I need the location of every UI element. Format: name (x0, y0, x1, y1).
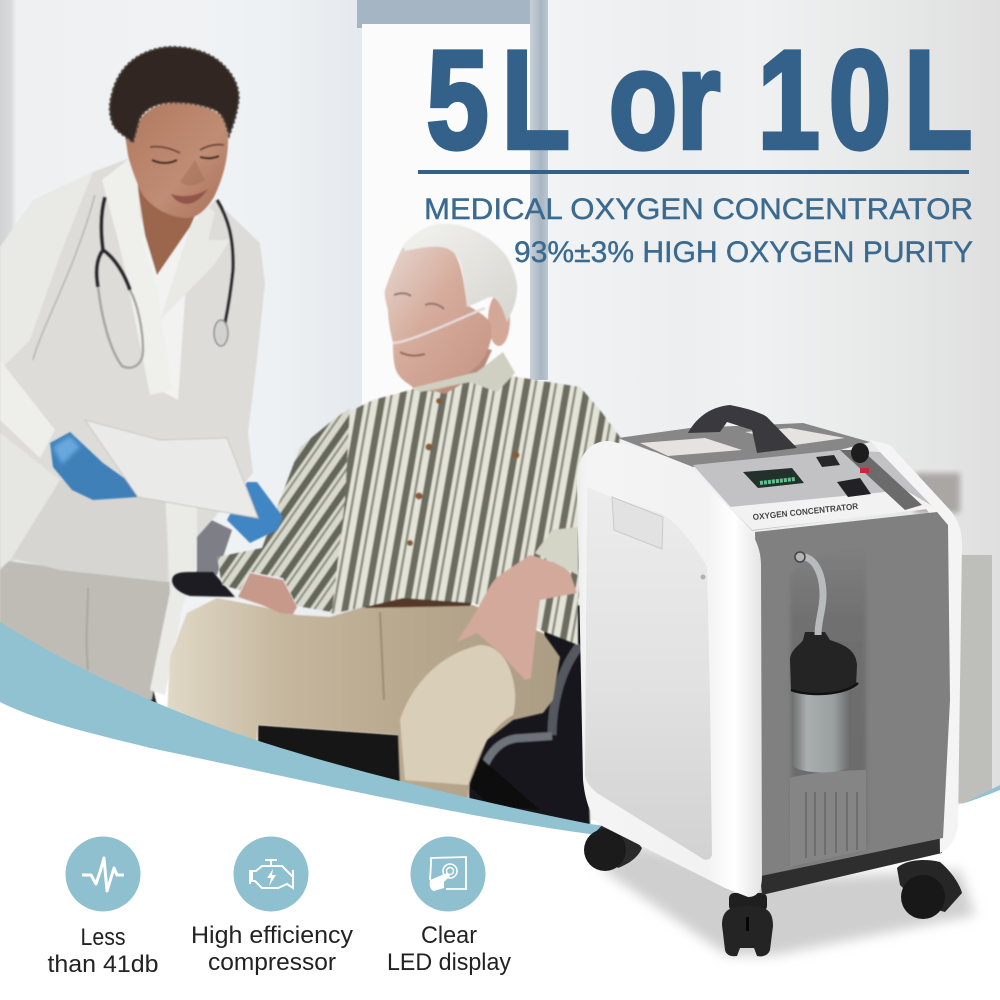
doctor eyes (152, 156, 219, 163)
doctor eyebrows (150, 145, 224, 153)
right knee highlight (400, 645, 515, 785)
blue glove left (50, 432, 138, 500)
black base (760, 836, 943, 895)
right lapel (160, 205, 230, 320)
patient shirt sleeve (217, 408, 350, 612)
flow knob (851, 443, 869, 463)
chair back (195, 512, 232, 575)
coat sleeve shading (0, 172, 93, 370)
doctor nose shade (180, 160, 205, 186)
patient mouth (400, 352, 425, 356)
feature text: High efficiency (191, 922, 353, 949)
subtitle line 1: MEDICAL OXYGEN CONCENTRATOR (424, 193, 973, 226)
wheelchair armrest (172, 572, 235, 597)
doctor neck (135, 170, 210, 275)
small switch (816, 455, 840, 467)
patient belt (365, 590, 473, 608)
footrest bracket (468, 757, 540, 810)
white front-left column (577, 441, 762, 897)
patient trousers (167, 598, 560, 805)
patient neck (410, 345, 492, 394)
patient collar (412, 352, 515, 392)
side handle recess (612, 497, 663, 549)
patient shirt torso (325, 370, 620, 645)
photo: wheelchair (138, 512, 590, 825)
rear caster (584, 822, 642, 871)
feature: high efficiency compressor (191, 836, 353, 976)
floor shadow (600, 845, 975, 955)
subtitle line 2: 93%±3% HIGH OXYGEN PURITY (514, 236, 973, 269)
nasal cannula (393, 308, 485, 343)
side panel (585, 487, 712, 860)
doctor's hands holding paper (50, 420, 283, 543)
humidifier lid (790, 632, 857, 693)
doctor trousers (0, 560, 172, 720)
LED display (743, 468, 804, 488)
patient eye (394, 293, 444, 309)
feature: clear LED display (387, 836, 511, 976)
trouser fly shading (380, 612, 384, 700)
feature: clear LED display: LED display (387, 949, 511, 976)
patient right hand (457, 555, 577, 680)
right cuff (535, 527, 578, 575)
scrub V-neck (137, 205, 190, 400)
product: oxygen concentrator (577, 405, 962, 956)
front recess (790, 545, 866, 866)
title divider (418, 170, 969, 174)
label text: OXYGEN CONCENTRATOR (752, 501, 859, 522)
humidifier bottle glass (792, 688, 851, 772)
doctor face (125, 103, 228, 218)
shirt buttons (407, 398, 520, 546)
grey front panel (755, 512, 950, 876)
right caster (897, 860, 962, 919)
feature text: Clear (421, 922, 477, 949)
flow meter (840, 450, 922, 510)
panel screw (700, 574, 706, 580)
feature: high efficiency compressor: compressor (208, 949, 336, 976)
blue glove right (227, 482, 283, 543)
top surface (618, 423, 870, 467)
title: 5L or 10L (426, 21, 972, 178)
carry handle (688, 405, 797, 453)
curved teal band (0, 622, 1000, 838)
front caster (722, 893, 773, 956)
control panel (693, 450, 933, 531)
doctor white coat (0, 158, 265, 695)
stethoscope (97, 197, 233, 368)
doctor hair (110, 47, 239, 143)
icon: sound wave (66, 836, 140, 912)
white label strip (730, 490, 936, 530)
right white rim (870, 440, 962, 853)
photo: doctor (0, 47, 265, 720)
feature: less than 41db (48, 836, 158, 978)
wheelchair wheel (468, 605, 590, 825)
humidifier tube (800, 557, 823, 635)
feature text: Less (80, 924, 126, 951)
photo: elderly patient (167, 224, 620, 805)
wheelchair seat (258, 725, 405, 795)
scrub lower panel (12, 480, 170, 582)
humidifier band (791, 683, 858, 694)
icon: touch screen (410, 836, 486, 912)
doctor lips (171, 189, 208, 204)
patient face (385, 244, 492, 391)
wheelchair silver tube (485, 736, 552, 765)
patient ear (488, 294, 510, 346)
tube connector (795, 552, 805, 562)
front frame post (138, 677, 157, 708)
left lapel (102, 158, 172, 395)
patient hair (403, 224, 517, 322)
red indicator (860, 468, 869, 473)
feature: less than 41db: than 41db (48, 951, 158, 978)
vent base (790, 770, 866, 867)
coat right panel (150, 490, 197, 695)
warning labels (640, 438, 742, 456)
paper sheet (85, 420, 258, 518)
icon: engine (234, 836, 308, 912)
white lower area (0, 702, 1000, 1000)
patient left hand (238, 573, 297, 614)
power switch (837, 478, 871, 497)
